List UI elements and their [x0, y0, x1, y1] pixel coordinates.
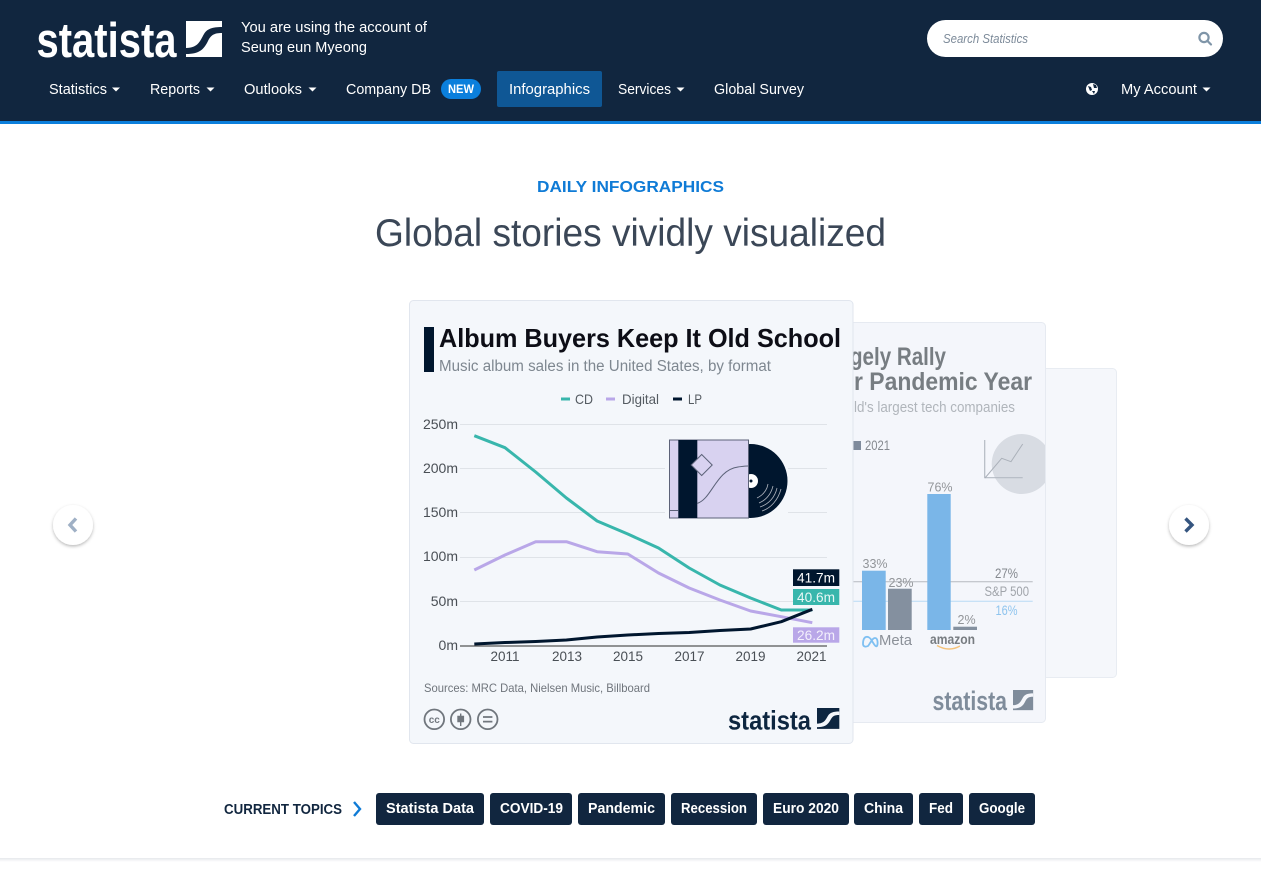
x axis labels: 2017: [674, 649, 705, 664]
subtitle: ld's largest tech companies: [854, 399, 1015, 416]
line: LP: [474, 609, 812, 644]
title accent bar: [424, 327, 434, 372]
brand: amazon: amazon: [930, 631, 975, 647]
topic: Fed: Fed: [929, 801, 953, 817]
bar values: 76%: [928, 480, 953, 494]
heading: [850, 343, 1032, 396]
value label: LP 41.7m: 41.7m: [797, 570, 835, 586]
icon: magnifier: [1199, 33, 1211, 44]
topic: Statista Data: Statista Data: [386, 801, 475, 817]
topic: China: China: [864, 801, 904, 817]
reference lines: S&P 500: S&P 500: [984, 584, 1029, 599]
heading: r Pandemic Year: [854, 368, 1032, 396]
topic: COVID-19: [490, 793, 572, 825]
x axis labels: 2019: [735, 649, 766, 664]
icon: globe: [1086, 83, 1098, 95]
topic: Pandemic: Pandemic: [588, 801, 655, 817]
active tab: infographics: Infographics: [509, 81, 590, 98]
topic: Euro 2020: [763, 793, 849, 825]
x axis labels: [490, 649, 827, 664]
reference lines: S&P 500: [853, 566, 1033, 618]
x axis labels: 2013: [552, 649, 582, 664]
logo: statista faded: statista: [932, 686, 1008, 716]
card: album buyers: [410, 300, 853, 744]
navigation: Global Survey: [714, 81, 804, 98]
topic: Fed: [919, 793, 963, 825]
brand: meta: [863, 633, 913, 649]
heading: gely Rally: [850, 343, 946, 371]
icons: creative commons: cc: [429, 715, 440, 726]
value label: Digital 26.2m: 26.2m: [797, 628, 835, 643]
line: CD: [474, 436, 812, 610]
section kicker: DAILY INFOGRAPHICS: [537, 179, 724, 196]
badge: new: [441, 79, 481, 99]
header bar: [0, 0, 1261, 124]
account text: You are using the account of: [241, 19, 428, 36]
y axis labels: 200m: [423, 460, 458, 476]
reference lines: S&P 500: 16%: [996, 603, 1018, 618]
value label: CD 40.6m: 40.6m: [797, 590, 835, 605]
brand: meta: Meta: [879, 633, 913, 649]
y axis labels: 0m: [439, 637, 458, 653]
search box: [927, 20, 1223, 57]
badge: new: NEW: [448, 84, 474, 96]
navigation: Services: [618, 81, 671, 98]
y axis labels: 100m: [423, 548, 458, 564]
icon: growth chart: [985, 434, 1045, 494]
card: tech companies rally: [800, 322, 1046, 722]
legend: CD: [575, 391, 593, 407]
bar values: 2%: [958, 613, 976, 627]
topic: Recession: [671, 793, 757, 825]
legend: 2021: [853, 438, 890, 453]
chart title: Album Buyers Keep It Old School: [439, 323, 841, 353]
topics label: CURRENT TOPICS: [224, 802, 342, 818]
topic: Pandemic: [578, 793, 665, 825]
navigation: Outlooks: [244, 81, 302, 98]
account text: [241, 19, 428, 56]
legend: 2021: 2021: [865, 438, 890, 453]
y axis labels: 250m: [423, 416, 458, 432]
topic: China: [854, 793, 913, 825]
search box: Search Statistics: [943, 32, 1028, 46]
carousel arrow: previous: [53, 505, 93, 545]
icons: creative commons: [424, 710, 498, 729]
x axis labels: 2011: [490, 649, 520, 664]
topic: Statista Data: [376, 793, 484, 825]
topic: Recession: Recession: [681, 801, 747, 817]
line: Digital: [474, 542, 812, 623]
current topics: [224, 793, 1035, 825]
icon: chevron: [354, 802, 360, 816]
navigation: My Account: [1121, 81, 1198, 98]
card: back blank: [1000, 368, 1116, 678]
topic: Euro 2020: Euro 2020: [773, 801, 839, 817]
chart subtitle: Music album sales in the United States, by format: [439, 358, 772, 375]
bar values: [862, 480, 976, 627]
navigation: Company DB: [346, 81, 431, 98]
y axis labels: 150m: [423, 504, 458, 520]
bars: [862, 494, 977, 630]
bar values: 33%: [862, 557, 888, 571]
legend: [561, 391, 702, 407]
y axis grid: [460, 424, 827, 646]
topic: COVID-19: COVID-19: [500, 801, 563, 817]
topic: Google: [969, 793, 1035, 825]
y axis labels: [423, 416, 458, 653]
logo: statista: statista: [728, 706, 812, 736]
x axis labels: 2021: [796, 649, 827, 664]
y axis labels: 50m: [431, 593, 458, 609]
page title: Global stories vividly visualized: [375, 212, 886, 255]
navigation: Statistics: [49, 81, 107, 98]
navigation: Reports: [150, 81, 200, 98]
illustration: album and record: [665, 436, 788, 522]
bar values: 23%: [888, 576, 914, 590]
active tab: infographics: [497, 71, 602, 107]
topic: Google: Google: [979, 801, 1025, 817]
reference lines: S&P 500: 27%: [995, 566, 1018, 581]
logo: statista: statista: [36, 14, 177, 68]
account text: Seung eun Myeong: [241, 39, 367, 56]
x axis labels: 2015: [613, 649, 643, 664]
source note: Sources: MRC Data, Nielsen Music, Billboard: [424, 681, 650, 695]
navigation: [49, 71, 1210, 107]
legend: LP: [688, 391, 702, 407]
carousel arrow: next: [1169, 505, 1209, 545]
legend: Digital: [622, 391, 659, 407]
